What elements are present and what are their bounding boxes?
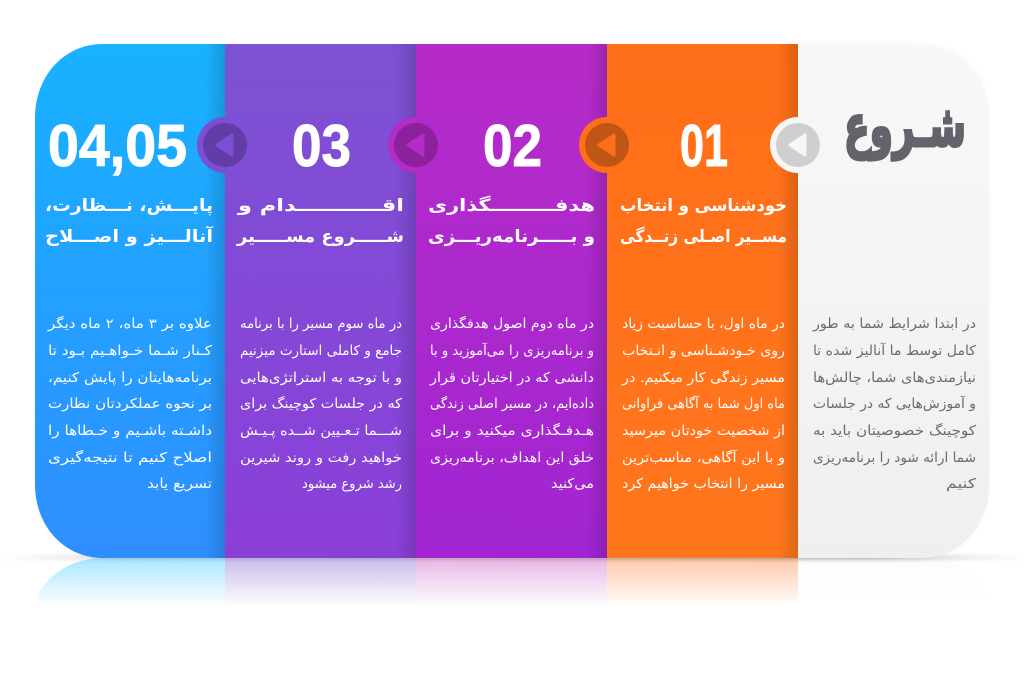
text block: month 01: و با این آگاهی، مناسب‌ترین bbox=[622, 449, 785, 466]
heading: month 01 bbox=[620, 196, 787, 247]
text block: start: کنیم bbox=[946, 476, 977, 492]
heading: month 03: شـــــروع مســـــیر bbox=[236, 227, 404, 247]
text block: month 01: مسیر را انتخاب خواهیم کرد bbox=[622, 476, 785, 492]
text block: month 03: خواهید رفت و روند شیرین bbox=[240, 450, 402, 466]
heading: months 04,05 bbox=[45, 196, 214, 247]
text block: months 04,05: اصلاح کنیم تا نتیجه‌گیری bbox=[48, 449, 212, 466]
heading: month 02: هدفـــــــــگذاری bbox=[428, 195, 595, 216]
text block: month 02: می‌کنید bbox=[551, 476, 594, 492]
panel: month 01 column bbox=[607, 44, 798, 558]
text block: month 01 bbox=[621, 316, 785, 492]
text block: months 04,05: برنامه‌هایتان را پایش کنیم، bbox=[48, 370, 212, 386]
heading: months 04,05: پایـــش، نـــظارت، bbox=[45, 196, 213, 216]
text block: months 04,05: بر نحوه عملکردتان نظارت bbox=[48, 396, 212, 412]
text block: month 01: روی خـودشـناسی و انـتخاب bbox=[622, 343, 785, 359]
text block: start bbox=[812, 316, 977, 492]
icon: arrow badge 03 bbox=[197, 117, 247, 173]
reflection below the card bbox=[36, 558, 798, 602]
text block: month 02: هـدفـگذاری میکنید و برای bbox=[430, 422, 594, 439]
text block: months 04,05: کـنار شـما خـواهـیم بـود تا bbox=[48, 343, 213, 359]
text block: month 03: و با توجه به استراتژی‌هایی bbox=[240, 370, 402, 386]
heading: month 03: اقـــــــــــدام و bbox=[237, 196, 404, 216]
text block: start: در ابتدا شرایط شما به طور bbox=[812, 316, 976, 332]
text block: month 02: داده‌ایم، در مسیر اصلی زندگی bbox=[430, 395, 594, 412]
text block: month 01: در ماه اول، با حساسیت زیاد bbox=[622, 316, 785, 332]
text block: months 04,05 bbox=[47, 315, 213, 492]
panel: columns card bbox=[35, 44, 989, 558]
icon: arrow badge 01 bbox=[579, 117, 629, 173]
panel: start column bbox=[798, 408, 989, 558]
number 04,05: 04,05 bbox=[48, 113, 187, 179]
text block: month 01: ماه اول شما به آگاهی فراوانی bbox=[622, 395, 785, 412]
text block: month 03: که در جلسات کوچینگ برای bbox=[240, 396, 403, 412]
text block: month 02: خلق این اهداف، برنامه‌ریزی bbox=[430, 450, 594, 466]
text block: month 02: و برنامه‌ریزی را می‌آموزید و با bbox=[430, 342, 594, 359]
text block: start: شما ارائه شود را برنامه‌ریزی bbox=[813, 450, 976, 466]
text block: months 04,05: داشـته باشـیم و خـطاها را bbox=[48, 423, 212, 439]
text block: month 01: از شخصیت خودتان میرسید bbox=[622, 423, 785, 439]
icon: arrow badge start bbox=[770, 117, 826, 173]
text block: start: کوچینگ خصوصیتان باید به bbox=[813, 423, 977, 439]
heading: month 02 bbox=[428, 195, 595, 247]
number 03: 03 bbox=[292, 113, 351, 179]
text block: month 03: در ماه سوم مسیر را با برنامه bbox=[240, 316, 402, 332]
text block: month 03: جامع و کاملی استارت میزنیم bbox=[240, 343, 402, 359]
heading: month 03 bbox=[236, 196, 404, 247]
text block: month 02: دانشی که در اختیارتان قرار bbox=[429, 370, 594, 386]
text block: month 03 bbox=[240, 316, 403, 492]
text block: start: نیازمندی‌های شما، چالش‌ها bbox=[813, 370, 976, 386]
text block: month 03: شـــما تـعـیین شــده پـیـش bbox=[240, 423, 402, 439]
heading: month 01: مســیر اصـلی زنــدگی bbox=[620, 226, 787, 247]
text block: months 04,05: علاوه بر ۳ ماه، ۲ ماه دیگر bbox=[47, 315, 212, 332]
panel: months 04,05 column bbox=[35, 44, 225, 558]
text block: start: و آموزش‌هایی که در جلسات bbox=[813, 395, 976, 412]
text block: month 02: در ماه دوم اصول هدفگذاری bbox=[430, 315, 594, 332]
heading: months 04,05: آنالـــیز و اصـــلاح bbox=[45, 225, 214, 247]
text block: month 03: رشد شروع میشود bbox=[302, 476, 402, 492]
number 01: 01 bbox=[680, 113, 728, 179]
icon: arrow badge 02 bbox=[388, 117, 438, 173]
text block: start: کامل توسط ما آنالیز شده تا bbox=[813, 342, 977, 359]
text block: month 01: مسیر زندگی کار میکنیم. در bbox=[621, 369, 785, 386]
panel: month 03 column bbox=[225, 44, 416, 558]
heading: month 02: و بـــــرنامه‌ریـــزی bbox=[428, 227, 595, 247]
number 02: 02 bbox=[483, 113, 542, 179]
panel: month 02 column bbox=[416, 44, 607, 558]
card soft outline bbox=[35, 44, 989, 558]
text block: month 02 bbox=[429, 315, 594, 492]
floor shadow bbox=[0, 555, 1024, 560]
heading: month 01: خودشناسی و انتخاب bbox=[620, 196, 787, 216]
text block: months 04,05: تسریع یابد bbox=[147, 476, 212, 492]
